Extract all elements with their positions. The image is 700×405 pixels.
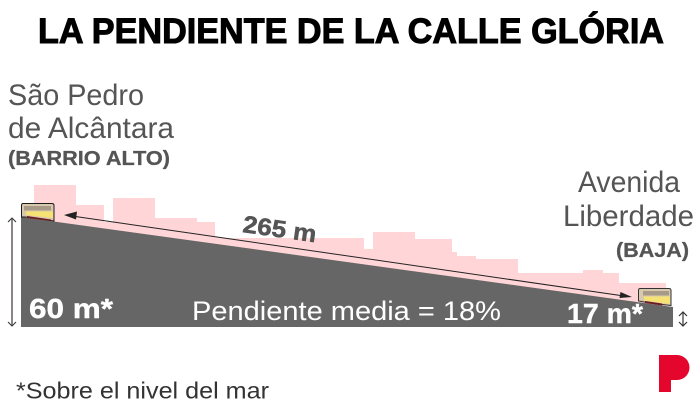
icon: logo — [659, 355, 690, 392]
arrow: lower height — [679, 312, 687, 326]
label: lower point — [563, 166, 694, 262]
label: upper point — [8, 79, 174, 170]
label: upper point: (BARRIO ALTO) — [8, 147, 170, 170]
label: average slope: Pendiente media = 18% — [192, 296, 501, 326]
hill slope — [21, 217, 673, 327]
footnote: *Sobre el nivel del mar — [16, 378, 269, 404]
label: distance: 265 m — [241, 211, 318, 248]
label: upper point: São Pedro — [8, 79, 144, 112]
arrow: upper height — [8, 218, 16, 326]
label: lower point: (BAJA) — [616, 239, 689, 262]
icon: upper tram — [22, 204, 54, 221]
title: LA PENDIENTE DE LA CALLE GLÓRIA — [38, 11, 664, 51]
label: upper altitude: 60 m* — [29, 293, 113, 324]
label: upper point: de Alcântara — [8, 112, 174, 145]
label: lower altitude: 17 m* — [567, 298, 643, 329]
icon: lower tram — [638, 288, 671, 306]
label: lower point: Avenida — [578, 166, 680, 199]
label: lower point: Liberdade — [563, 200, 694, 233]
pink building skyline — [34, 185, 666, 310]
arrow: slope distance — [64, 212, 632, 298]
